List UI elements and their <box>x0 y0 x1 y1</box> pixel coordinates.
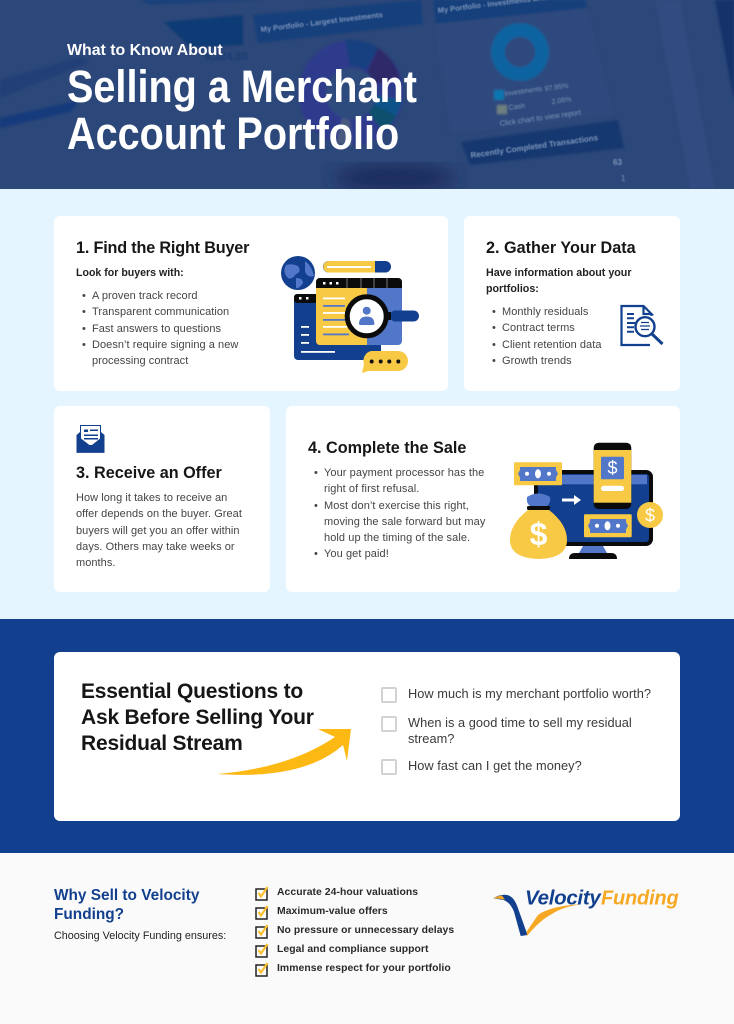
bullet list: • <box>82 290 86 302</box>
header banner <box>0 0 734 189</box>
heading: Essential Questions to <box>81 680 303 703</box>
bullet list: moving the sale forward but may <box>324 516 485 528</box>
header background dashboard photo: 97.95% <box>544 83 569 93</box>
checklist item 1 <box>255 886 418 901</box>
bullet list: Fast answers to questions <box>92 323 221 335</box>
checklist item 2 <box>255 905 388 920</box>
bullet list: • <box>492 306 496 318</box>
bullet list: Client retention data <box>502 339 602 351</box>
icon: money transfer illustration <box>510 442 663 559</box>
icon: buyer search illustration <box>281 256 419 373</box>
header background dashboard photo: 2.05% <box>551 96 572 106</box>
subheading: Have information about your <box>486 267 631 279</box>
bullet list: • <box>492 339 496 351</box>
body text: buyers will get you an offer within <box>76 525 240 537</box>
panel: receive an offer <box>54 406 270 592</box>
subheading: Look for buyers with: <box>76 267 184 279</box>
bullet list: You get paid! <box>324 548 389 560</box>
panel: gather your data <box>464 216 680 391</box>
heading: 2. Gather Your Data <box>486 239 636 257</box>
header eyebrow: What to Know About <box>67 42 223 59</box>
question 1: How much is my merchant portfolio worth? <box>408 686 651 701</box>
icon: money transfer illustration: $ <box>645 506 655 526</box>
subheading: portfolios: <box>486 283 539 295</box>
question 3: How fast can I get the money? <box>408 758 582 773</box>
checklist item 5: Immense respect for your portfolio <box>277 963 451 974</box>
bullet list: Your payment processor has the <box>324 466 484 478</box>
panel: complete the sale <box>286 406 680 592</box>
icon: document magnifier <box>620 304 664 346</box>
checklist item 5 <box>255 962 451 977</box>
bullet list: • <box>314 500 318 512</box>
header background dashboard photo: Investments <box>504 86 543 98</box>
header background dashboard photo: 63 <box>613 158 622 167</box>
heading: Residual Stream <box>81 732 243 755</box>
checklist <box>255 886 454 977</box>
bullet list: Growth trends <box>502 355 572 367</box>
bullet list <box>82 290 238 367</box>
intro text: Choosing Velocity Funding ensures: <box>54 930 226 942</box>
section: essential questions background <box>0 619 734 853</box>
heading <box>81 680 314 755</box>
bullet list: • <box>492 322 496 334</box>
body text: offer depends on the buyer. Great <box>76 508 242 520</box>
checklist item 3: No pressure or unnecessary delays <box>277 925 454 936</box>
bullet list: Most don’t exercise this right, <box>324 500 469 512</box>
bullet list: • <box>82 339 86 351</box>
question 2: When is a good time to sell my residual <box>408 715 632 730</box>
header background dashboard photo: My Portfolio - Largest Investments <box>260 10 383 34</box>
logo: velocity funding <box>493 886 678 936</box>
header title <box>67 61 417 158</box>
bullet list: • <box>82 306 86 318</box>
bullet list <box>492 306 602 367</box>
heading: 3. Receive an Offer <box>76 464 222 482</box>
logo: velocity funding: Funding <box>601 887 678 909</box>
heading <box>54 887 200 923</box>
body text <box>76 492 242 569</box>
question 2 <box>381 715 632 746</box>
header background dashboard photo <box>0 0 734 189</box>
bullet list: • <box>82 323 86 335</box>
bullet list: A proven track record <box>92 290 198 302</box>
bullet list <box>314 466 486 560</box>
heading: 1. Find the Right Buyer <box>76 239 249 257</box>
bullet list: hold up the timing of the sale. <box>324 532 470 544</box>
donut left <box>312 54 390 132</box>
bullet list: right of first refusal. <box>324 483 419 495</box>
heading: Funding? <box>54 906 124 923</box>
icon: money transfer illustration: $ <box>530 516 548 552</box>
donut right <box>498 30 542 74</box>
section: why sell to velocity funding <box>0 853 734 1024</box>
body text: How long it takes to receive an <box>76 492 227 504</box>
bullet list: Contract terms <box>502 322 575 334</box>
heading: 4. Complete the Sale <box>308 439 466 457</box>
logo: velocity funding: Velocity <box>525 886 602 909</box>
heading: Why Sell to Velocity <box>54 887 199 904</box>
header background dashboard photo: Cash <box>508 103 526 112</box>
icon: envelope <box>76 425 104 453</box>
header background dashboard photo: Recently Completed Transactions <box>470 133 599 160</box>
body text: days. Others may take weeks or <box>76 541 235 553</box>
checklist item 2: Maximum-value offers <box>277 906 388 917</box>
header background dashboard photo: Click chart to view report <box>499 108 582 128</box>
body text: months. <box>76 557 115 569</box>
header background dashboard photo: 1 <box>621 174 626 183</box>
icon: money transfer illustration: $ <box>607 458 618 478</box>
bullet list: Transparent communication <box>92 306 229 318</box>
bullet list: processing contract <box>92 355 188 367</box>
bullet list: • <box>492 355 496 367</box>
header background dashboard photo: 6,324.60 <box>205 51 248 63</box>
bullet list: Monthly residuals <box>502 306 588 318</box>
checklist item 4 <box>255 943 429 958</box>
header title: Selling a Merchant <box>67 61 417 112</box>
panel: essential questions <box>54 652 680 821</box>
panel: find the right buyer <box>54 216 448 391</box>
bullet list: • <box>314 548 318 560</box>
arrow <box>217 729 351 775</box>
checklist item 3 <box>255 924 454 939</box>
bullet list: Doesn’t require signing a new <box>92 339 238 351</box>
header title: Account Portfolio <box>67 108 399 158</box>
bullet list: • <box>314 466 318 478</box>
question 2: stream? <box>408 731 454 746</box>
checklist item 1: Accurate 24-hour valuations <box>277 887 418 898</box>
heading: Ask Before Selling Your <box>81 706 314 729</box>
checklist item 4: Legal and compliance support <box>277 944 429 955</box>
subheading <box>486 267 632 295</box>
